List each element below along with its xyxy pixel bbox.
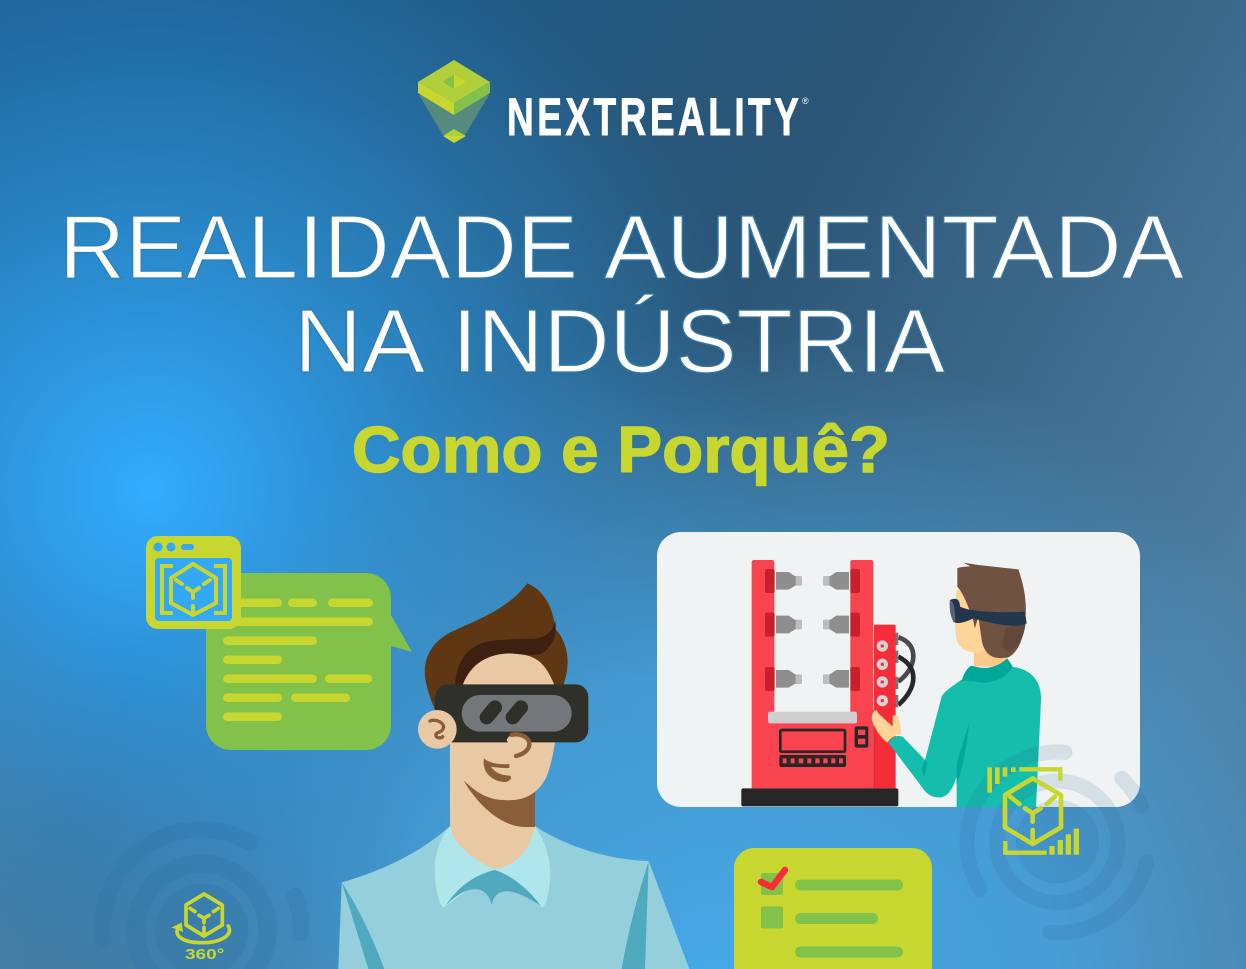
title	[59, 198, 1184, 392]
ear	[418, 710, 457, 749]
checklist card	[734, 848, 932, 969]
operator hand	[872, 710, 902, 743]
shirt	[338, 826, 689, 969]
cables	[898, 637, 913, 705]
icon: AR cube with signal bars	[987, 767, 1079, 855]
machine	[741, 560, 913, 806]
hair back	[425, 583, 568, 710]
panel: machine operator	[657, 532, 1140, 808]
logo	[418, 60, 809, 147]
operator sweater	[888, 667, 1041, 808]
title: INDÚSTRIA	[452, 292, 945, 392]
shelf	[768, 712, 857, 723]
collar	[435, 826, 550, 907]
nose	[507, 734, 529, 757]
icon: red check mark	[761, 870, 785, 887]
operator hair	[957, 563, 1026, 658]
hair shade	[1003, 622, 1026, 652]
registered mark: ®	[802, 96, 809, 106]
machine frame	[752, 560, 873, 788]
mouth	[484, 759, 511, 782]
operator neck	[974, 650, 1007, 667]
machine switch	[855, 726, 868, 748]
title: NA	[294, 292, 425, 392]
decorative rings: right	[967, 752, 1147, 933]
machine base	[741, 788, 898, 806]
neck	[450, 737, 535, 869]
icon: AR browser window	[146, 536, 241, 629]
checkboxes	[761, 873, 783, 928]
icon: 360 degree cube	[172, 894, 230, 963]
clamps	[765, 569, 860, 691]
control panel buttons	[877, 640, 888, 706]
keypad	[779, 755, 846, 767]
icon: logo cube	[418, 60, 490, 143]
collar underside	[446, 870, 541, 906]
face	[450, 653, 557, 800]
subtitle: Como e Porquê?	[352, 413, 890, 486]
chin shadow	[463, 780, 535, 827]
operator AR glasses	[950, 599, 1027, 626]
side control panel	[874, 625, 896, 788]
AR goggles	[435, 684, 588, 742]
sleeve shadows	[342, 861, 649, 969]
bubble text lines	[222, 598, 373, 721]
title: REALIDADE	[59, 198, 578, 298]
logo wordmark: NEXTREALITY	[507, 87, 799, 147]
operator	[872, 563, 1041, 808]
360 label: 360°	[185, 947, 224, 963]
operator head	[955, 590, 984, 652]
chat bubble	[206, 573, 412, 750]
machine display	[780, 730, 845, 752]
hair shadow	[455, 620, 556, 685]
title: AUMENTADA	[604, 198, 1184, 298]
decorative rings: left	[103, 830, 301, 969]
person with AR goggles	[338, 583, 689, 969]
checklist lines	[795, 880, 903, 958]
sweater shadows	[922, 658, 1013, 785]
